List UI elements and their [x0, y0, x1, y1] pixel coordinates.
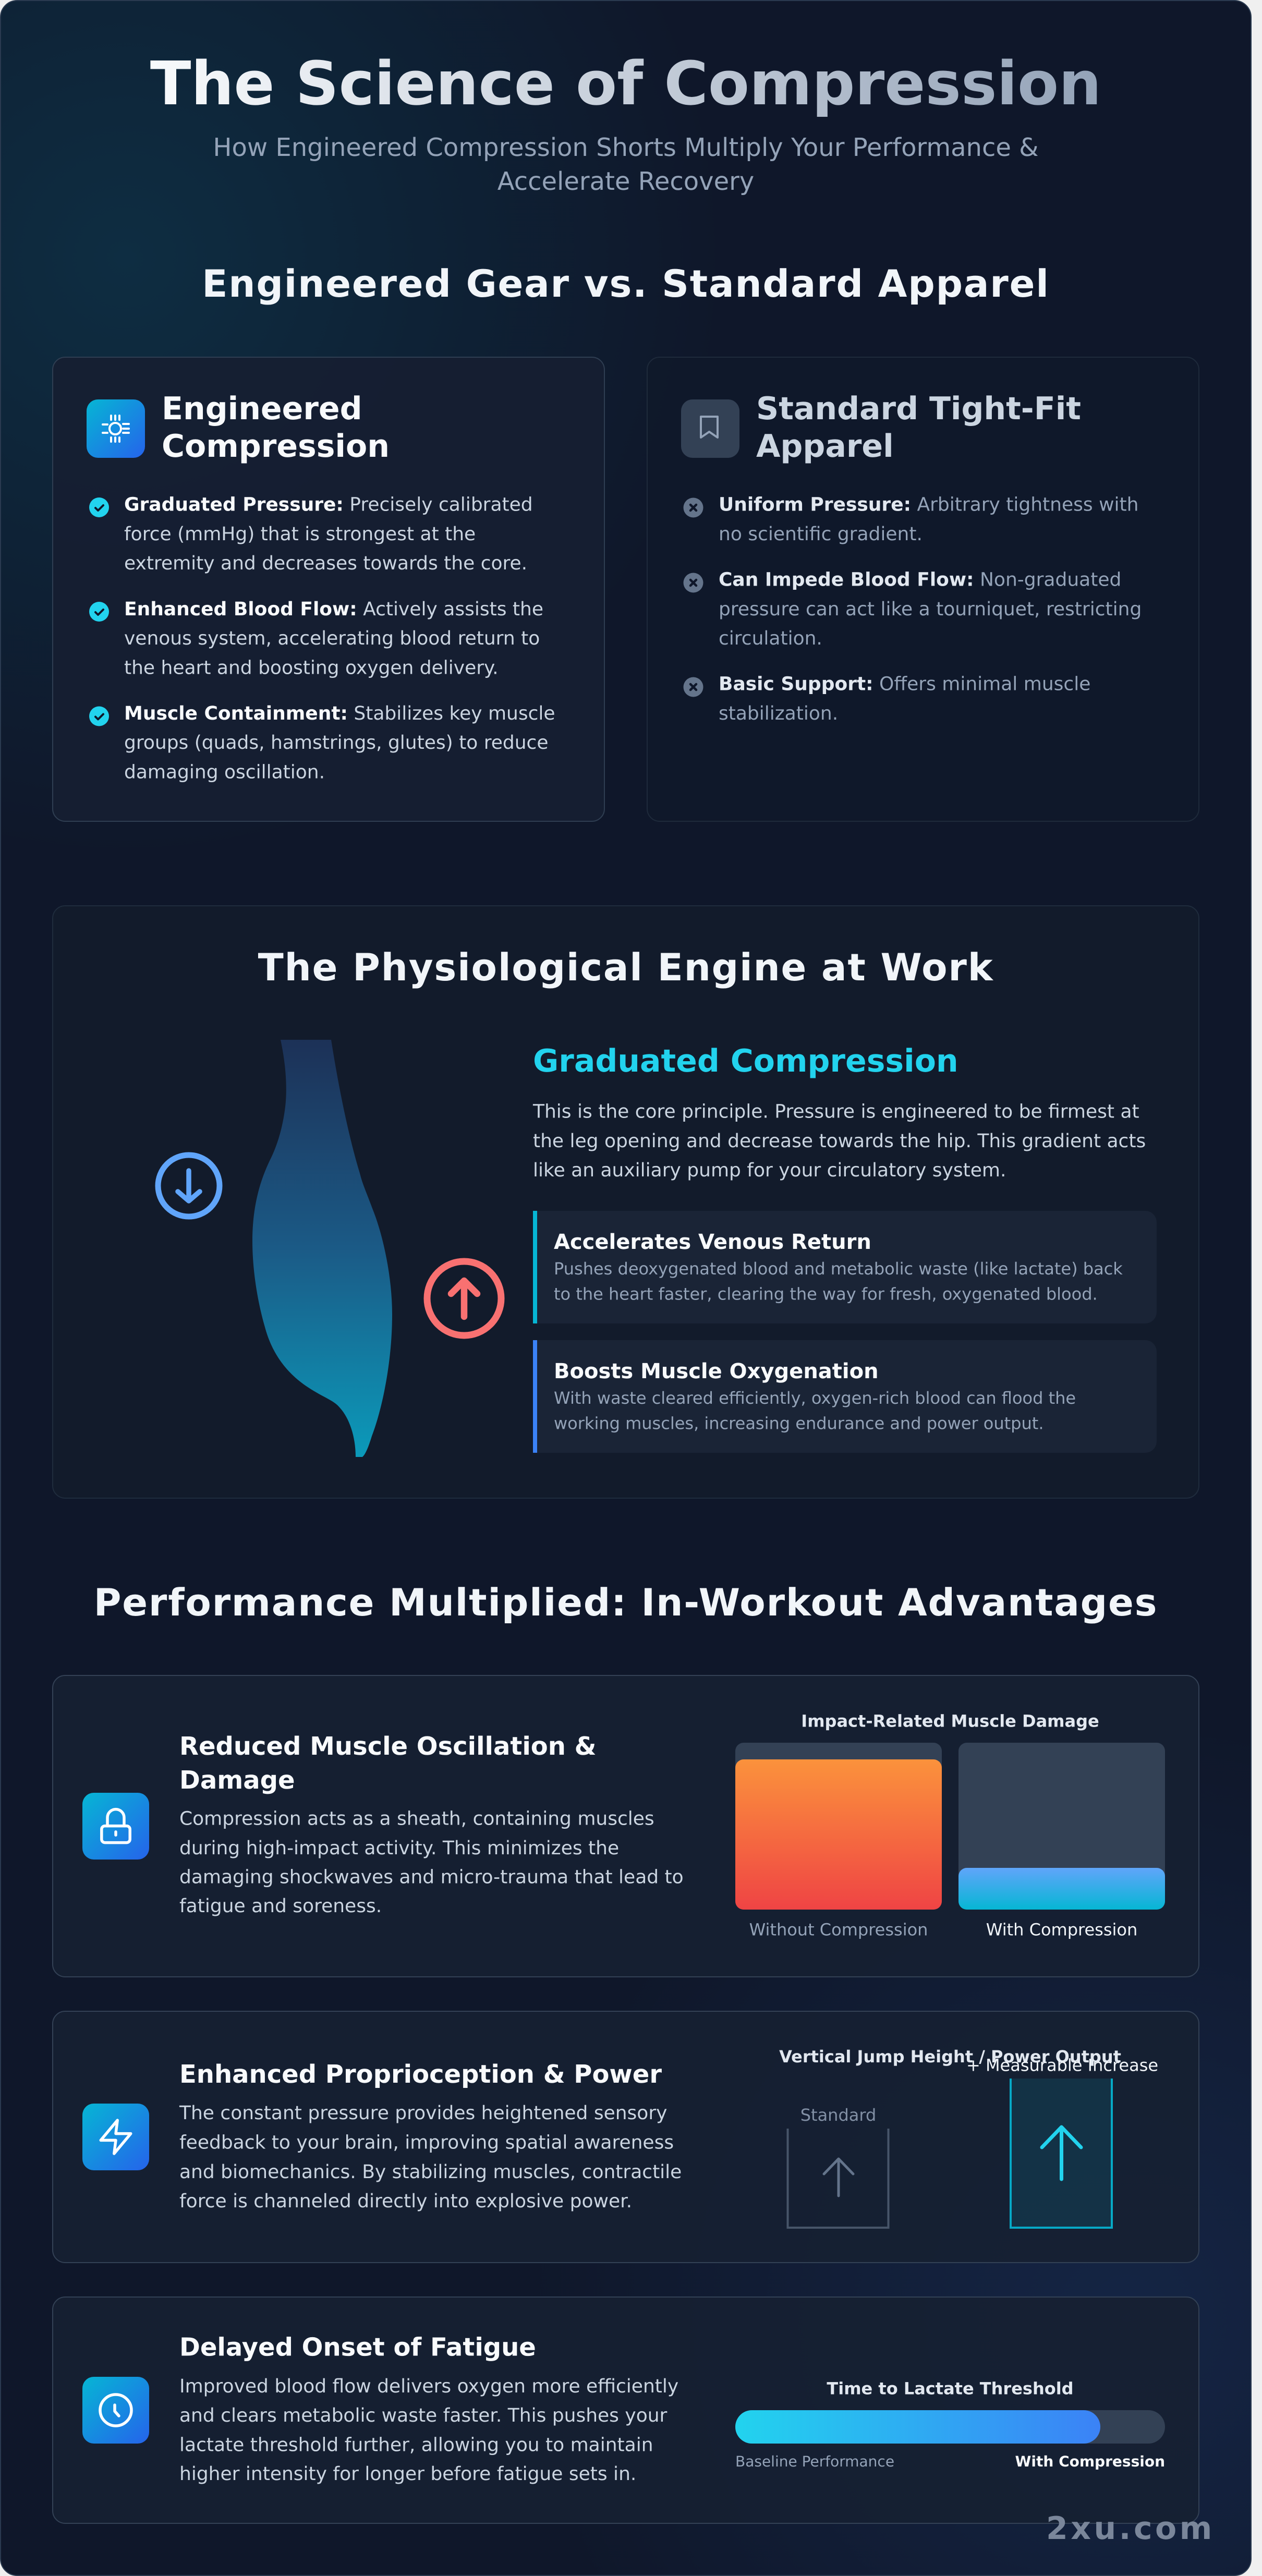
benefit: enhanced blood flow	[124, 599, 543, 679]
text: reduced muscle oscillation description: damaging shockwaves and micro-trauma that lead to	[179, 1867, 684, 1888]
benefit: graduated pressure: force (mmHg) that is strongest at the	[124, 524, 476, 545]
heading: engineered gear vs standard apparel: Engineered Gear vs. Standard Apparel	[202, 262, 1050, 306]
chart: impact-related muscle damage: Impact-Related Muscle Damage	[801, 1711, 1099, 1731]
drawback: uniform pressure: no scientific gradient.	[719, 524, 923, 545]
card: boosts muscle oxygenation: With waste cleared efficiently, oxygen-rich blood can flood the	[554, 1388, 1076, 1408]
icon: lock	[82, 1793, 149, 1860]
benefit: enhanced blood flow: the heart and boosting oxygen delivery.	[124, 657, 499, 679]
text: graduated compression description: the leg opening and decrease towards the hip. This gradient acts	[533, 1131, 1146, 1152]
chart: time to lactate threshold	[735, 2379, 1165, 2470]
icon: red arrow up circle	[427, 1261, 501, 1335]
drawback: basic support: stabilization.	[719, 703, 838, 724]
icon: blue arrow down circle	[158, 1155, 220, 1217]
benefit: muscle containment: groups (quads, hamstrings, glutes) to reduce	[124, 732, 548, 754]
bar: with compression	[966, 2056, 1158, 2229]
drawback: can impede blood flow: Can Impede Blood Flow: Non-graduated	[719, 569, 1121, 590]
muscle shape	[252, 1040, 392, 1457]
drawback: can impede blood flow: circulation.	[719, 628, 822, 649]
heading: engineered compression: Compression	[162, 428, 390, 465]
bar: with compression: With Compression	[986, 1920, 1137, 1940]
bar: without compression	[735, 1743, 942, 1940]
text: reduced muscle oscillation description	[179, 1808, 684, 1917]
icon: clock	[82, 2377, 149, 2444]
card: accelerates venous return: Accelerates Venous Return	[554, 1230, 871, 1254]
card: boosts muscle oxygenation	[533, 1340, 1157, 1453]
icon: bookmark	[681, 399, 739, 458]
chart: time to lactate threshold: With Compression	[1015, 2453, 1165, 2470]
heading: proprioception and power: Enhanced Proprioception & Power	[179, 2060, 662, 2089]
watermark: 2xu.com	[1046, 2510, 1215, 2547]
text: reduced muscle oscillation description: during high-impact activity. This minimizes the	[179, 1838, 619, 1859]
drawback: basic support: Basic Support: Offers minimal muscle	[719, 674, 1090, 695]
title: The Science of Compression	[150, 49, 1101, 119]
bar: standard: Standard	[800, 2105, 876, 2125]
benefit: enhanced blood flow: venous system, accelerating blood return to	[124, 628, 540, 649]
subtitle: How Engineered Compression Shorts Multiply Your Performance &	[213, 133, 1039, 162]
benefit: graduated pressure	[124, 494, 533, 574]
icon: check 3	[89, 706, 109, 726]
benefit: muscle containment: Muscle Containment: Stabilizes key muscle	[124, 703, 555, 724]
heading: reduced muscle oscillation: Damage	[179, 1766, 295, 1795]
text: fatigue description: lactate threshold further, allowing you to maintain	[179, 2434, 653, 2456]
panel: standard tight-fit apparel	[647, 357, 1199, 821]
diagram: muscle with pressure arrows	[158, 1040, 501, 1457]
text: proprioception description: feedback to your brain, improving spatial awareness	[179, 2132, 674, 2154]
text: proprioception description: and biomechanics. By stabilizing muscles, contractile	[179, 2161, 682, 2183]
text: graduated compression description: This is the core principle. Pressure is engineered to be firmest at	[532, 1101, 1139, 1122]
panel: delayed onset of fatigue	[53, 2297, 1199, 2523]
card: accelerates venous return: Pushes deoxygenated blood and metabolic waste (like lactate) back	[554, 1259, 1123, 1279]
heading: engineered compression	[162, 391, 390, 465]
heading: delayed onset of fatigue: Delayed Onset of Fatigue	[179, 2333, 536, 2362]
text: proprioception description: force is channeled directly into explosive power.	[179, 2191, 632, 2212]
heading: standard tight-fit apparel: Standard Tight-Fit	[756, 391, 1081, 427]
heading: standard tight-fit apparel: Apparel	[756, 428, 894, 465]
list: standard drawbacks	[683, 494, 1142, 724]
subtitle	[213, 133, 1039, 196]
icon: check 1	[89, 497, 109, 517]
drawback: uniform pressure	[719, 494, 1138, 545]
icon: check 2	[89, 602, 109, 622]
benefit: muscle containment	[124, 703, 555, 783]
text: fatigue description: higher intensity for longer before fatigue sets in.	[179, 2463, 636, 2485]
icon: bolt	[82, 2104, 149, 2170]
bar: with compression: + Measurable Increase	[966, 2056, 1158, 2075]
drawback: basic support	[719, 674, 1090, 724]
chart: vertical jump height: Vertical Jump Height / Power Output	[779, 2047, 1121, 2067]
chart: vertical jump height	[779, 2047, 1158, 2229]
card: accelerates venous return: to the heart faster, clearing the way for fresh, oxygenated blood.	[554, 1284, 1098, 1304]
text: fatigue description: Improved blood flow delivers oxygen more efficiently	[179, 2376, 678, 2397]
chart: time to lactate threshold: Time to Lactate Threshold	[827, 2379, 1074, 2399]
text: proprioception description: The constant pressure provides heightened sensory	[179, 2103, 667, 2124]
benefit: enhanced blood flow: Enhanced Blood Flow: Actively assists the	[124, 599, 543, 620]
text: proprioception description	[179, 2103, 682, 2212]
panel: proprioception and power	[53, 2011, 1199, 2263]
panel: physiological engine	[53, 906, 1199, 1498]
heading: reduced muscle oscillation: Reduced Muscle Oscillation &	[179, 1732, 597, 1761]
chart: time to lactate threshold: Baseline Performance	[735, 2453, 894, 2470]
benefit: muscle containment: damaging oscillation.	[124, 761, 325, 783]
heading: reduced muscle oscillation	[179, 1732, 597, 1795]
card: accelerates venous return	[533, 1211, 1157, 1323]
heading: standard tight-fit apparel	[756, 391, 1081, 465]
text: fatigue description	[179, 2376, 678, 2485]
icon: x 1	[683, 497, 703, 517]
heading: physiological engine: The Physiological Engine at Work	[258, 945, 994, 989]
text: fatigue description: and clears metabolic waste faster. This pushes your	[179, 2405, 668, 2426]
panel: engineered compression	[53, 357, 604, 821]
heading: graduated compression: Graduated Compression	[533, 1043, 958, 1079]
card: boosts muscle oxygenation: Boosts Muscle Oxygenation	[554, 1359, 879, 1383]
text: reduced muscle oscillation description: fatigue and soreness.	[179, 1895, 382, 1917]
list: engineered benefits	[89, 494, 555, 783]
bar: without compression: Without Compression	[749, 1920, 928, 1940]
icon: x 2	[683, 573, 703, 592]
benefit: graduated pressure: extremity and decreases towards the core.	[124, 553, 527, 574]
drawback: uniform pressure: Uniform Pressure: Arbitrary tightness with	[719, 494, 1138, 515]
text: graduated compression description	[532, 1101, 1146, 1181]
panel: reduced muscle oscillation	[53, 1675, 1199, 1977]
heading: performance multiplied: Performance Multiplied: In-Workout Advantages	[94, 1581, 1158, 1624]
bar: with compression	[958, 1743, 1165, 1940]
chart: impact-related muscle damage	[735, 1711, 1165, 1940]
text: reduced muscle oscillation description: Compression acts as a sheath, containing muscles	[179, 1808, 654, 1829]
icon: x 3	[683, 677, 703, 697]
subtitle: Accelerate Recovery	[497, 167, 754, 196]
benefit: graduated pressure: Graduated Pressure: Precisely calibrated	[124, 494, 533, 515]
icon: chip	[87, 399, 145, 458]
drawback: can impede blood flow: pressure can act like a tourniquet, restricting	[719, 599, 1142, 620]
bar: standard	[787, 2105, 889, 2228]
drawback: can impede blood flow	[719, 569, 1142, 649]
card: boosts muscle oxygenation: working muscles, increasing endurance and power output.	[554, 1413, 1043, 1433]
text: graduated compression description: like an auxiliary pump for your circulatory system.	[533, 1160, 1006, 1181]
heading: engineered compression: Engineered	[162, 391, 362, 427]
